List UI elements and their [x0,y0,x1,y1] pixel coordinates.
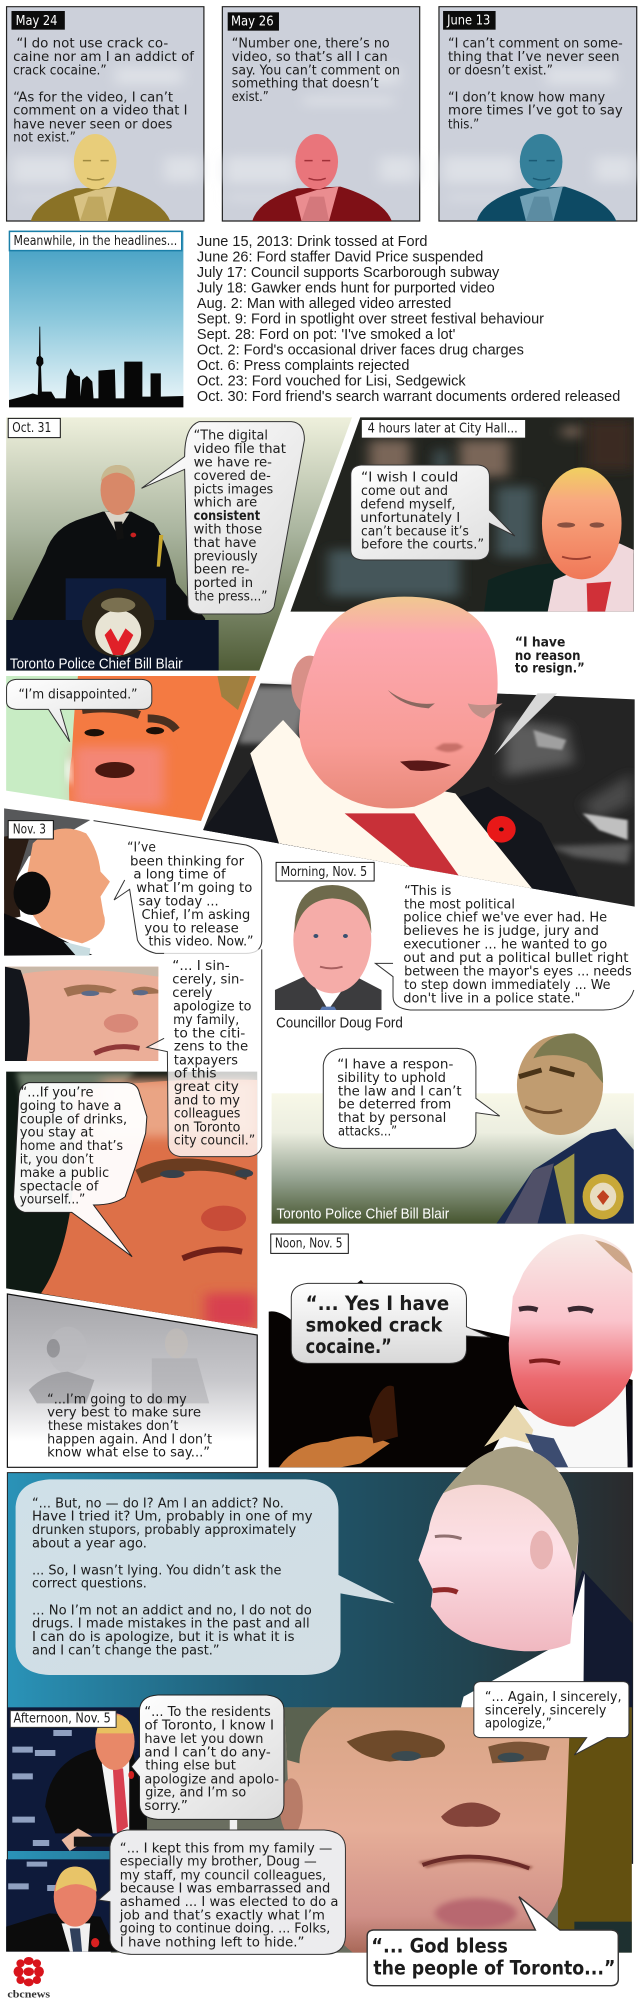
panel: Blair responsibility [272,1033,634,1224]
speech bubble: sincerely apologize: to the citi- [174,1026,245,1041]
speech bubble: you to release [144,921,239,936]
speech bubble: kept this from my family: going to continue doing. ... Folks, [120,1921,330,1936]
panel: Ford apologizing close-up [5,967,158,1061]
date label [271,1234,348,1253]
speech bubble: you stay at [20,1125,94,1140]
speech bubble: again I sincerely [474,1682,629,1755]
speech bubble: residents of Toronto: thing else but [145,1758,236,1773]
speech bubble: sincerely apologize: and to my [174,1093,240,1108]
quote: “I have [515,635,565,650]
quote [232,36,400,105]
panel: 4 hours later [290,417,634,612]
panel: May 24 [7,7,204,221]
speech bubble: sincerely apologize [147,949,262,1157]
speech bubble: “I’m disappointed.” [18,687,137,702]
speech bubble: the press...” [194,589,267,604]
quote: these mistakes don’t [48,1418,179,1434]
headline list: June 15, 2013: Drink tossed at Ford [197,234,427,250]
panel: Noon Nov. 5 [269,1234,633,1467]
speech bubble: video file that [194,441,286,457]
figure: Ford close-up profile [16,1072,257,1330]
date label [8,418,60,438]
panel: Toronto skyline [9,231,183,407]
speech bubble: sincerely apologize: of this [174,1066,217,1081]
speech bubble: covered de- [194,468,271,484]
speech bubble: kept this from my family: my staff, my council colleagues, [120,1868,326,1883]
quote: very best to make sure [47,1405,201,1420]
panel: Nov. 3 Ford on radio [4,808,262,956]
quote: not exist.” [13,130,76,145]
speech bubble: cocaine.” [306,1336,392,1358]
headline list: Oct. 2: Ford's occasional driver faces drug charges [197,342,524,358]
speech bubble: residents of Toronto: sorry.” [144,1798,188,1814]
speech bubble: ported in [194,575,253,591]
speech bubble: defend myself, [360,497,455,512]
headline list: July 18: Gawker ends hunt for purported video [197,280,495,296]
speech bubble: God bless: “... God bless [371,1936,508,1958]
speech bubble [291,1283,490,1363]
speech bubble: sincerely apologize: my family, [173,1012,239,1028]
figure: Ford at noon [279,1234,633,1467]
panel: Oct. 31 Chief Blair at podium [6,417,352,672]
speech bubble: been re- [194,562,249,577]
speech bubble: that have [194,535,256,551]
quote: exist.” [232,89,269,105]
figure: Ford with headphones [4,808,110,956]
headline list: July 17: Council supports Scarborough subway [197,265,499,281]
figure: Ford eyes [5,967,158,1061]
speech bubble [14,1083,147,1257]
speech bubble: previously [194,549,258,564]
quote: “I don’t know how many [448,90,605,105]
speech bubble: which are [194,495,257,510]
quote: caine nor am I an addict of [13,49,195,65]
quote: comment on a video that I [13,103,187,118]
speech bubble: kept this from my family: ashamed ... I was elected to do a [120,1894,338,1910]
speech bubble: picts images [194,482,273,497]
speech bubble: the law and I can’t [338,1084,462,1099]
quote [13,36,195,145]
wordmark: cbcnews [7,1988,50,2000]
panel: disappointed Ford [6,676,256,823]
panel: closeup with quote [6,949,262,1330]
panel: teal "not an addict" [7,1447,633,1863]
speech bubble [351,465,515,560]
figure: ghost radio studio [29,1327,209,1403]
speech bubble: can’t because it’s [361,524,469,539]
quote: say. You can’t comment on [232,63,400,78]
speech bubble: residents of Toronto: “... To the residents [144,1704,271,1720]
time label [362,420,525,438]
speech bubble: sincerely apologize: cerely [172,985,213,1001]
headline list: Sept. 9: Ford in spotlight over street festival behaviour [197,311,545,327]
headline list: June 26: Ford staffer David Price suspended [197,249,483,265]
speech bubble: sincerely apologize: taxpayers [174,1053,238,1068]
date label: Noon, Nov. 5 [275,1236,343,1251]
speech bubble [323,1048,500,1148]
headline list: Sept. 28: Ford on pot: 'I've smoked a lot' [197,327,455,343]
quote: “Number one, there’s no [232,36,390,51]
figure: Ford close-up [66,676,256,823]
speech bubble: home and that’s [20,1138,123,1154]
panel: May 26 [222,7,420,221]
figure: red Ford [252,134,392,221]
speech bubble: “This is [404,883,451,899]
speech bubble [142,422,304,614]
speech bubble: smoked crack [306,1315,443,1337]
speech bubble: come out and [361,483,448,499]
speech bubble: attacks...” [338,1124,397,1139]
afternoon label [10,1711,116,1727]
caption: Toronto Police Chief Bill Blair [277,1206,450,1222]
speech bubble: ... No I’m not an addict and no, I do not do [32,1603,312,1618]
speech bubble: “I’ve [127,840,156,855]
speech bubble: kept this from my family: especially my brother, Doug — [120,1854,317,1869]
figure: Bill Blair [6,465,219,671]
date label: May 26 [231,14,274,29]
speech tail [494,693,557,755]
date label: Oct. 31 [12,420,51,436]
speech bubble: “... Yes I have [306,1293,449,1315]
speech bubble: “... But, no — do I? Am I an addict? No. [32,1496,284,1511]
speech bubble: it, you don’t [20,1152,94,1167]
quote: “I do not use crack co- [16,36,168,51]
speech bubble: ... So, I wasn’t lying. You didn’t ask the [32,1563,281,1578]
panel: Ford no reason to resign [203,597,635,907]
quote: no reason [515,648,581,664]
speech bubble: residents of Toronto: of Toronto, I know I [144,1718,274,1733]
headline list: Oct. 6: Press complaints rejected [197,358,409,374]
figure: Ford in profile [418,1446,632,1864]
speech bubble [375,883,634,1010]
speech bubble: yourself...” [20,1192,85,1207]
speech bubble: what I’m going to [136,880,252,896]
speech bubble: before the courts.” [361,537,484,552]
speech bubble [7,679,152,742]
figure: yellow Ford [31,134,170,221]
speech bubble: couple of drinks, [20,1112,127,1127]
date label: May 24 [16,13,57,29]
caption: Councillor Doug Ford [276,1015,403,1031]
quote: to resign.” [515,661,585,676]
speech bubble: been thinking for [130,854,244,869]
time label: 4 hours later at City Hall... [368,421,518,436]
quote: this.” [448,117,479,132]
speech bubble: residents of Toronto: and I can’t do any- [144,1745,271,1760]
speech bubble: sincerely apologize: colleagues [174,1106,240,1121]
date label [11,11,65,30]
speech bubble: sibility to uphold [337,1070,446,1086]
speech bubble: about a year ago. [32,1536,147,1551]
speech bubble: correct questions. [32,1576,147,1591]
figure: Ford's large face [230,1707,632,1953]
speech bubble: residents of Toronto [131,1695,284,1819]
speech bubble: Have I tried it? Um, probably in one of my [32,1509,313,1524]
speech bubble: and I can’t change the past.” [32,1643,219,1658]
speech bubble: God bless [367,1897,618,1986]
heading label [9,231,182,251]
quote: know what else to say...” [47,1445,210,1460]
speech bubble: believes he is judge, jury and [403,923,599,939]
speech bubble: a long time of [133,867,226,882]
speech bubble: again I sincerely: apologize,” [485,1716,552,1731]
speech bubble: sincerely apologize: on Toronto [174,1120,240,1135]
speech bubble: sincerely apologize: zens to the [174,1039,248,1054]
speech bubble: kept this from my family: because I was embarrassed and [120,1881,330,1896]
speech bubble [16,1479,395,1675]
figure: Doug Ford [275,885,382,1010]
speech bubble: the most political [404,897,515,912]
caption: Toronto Police Chief Bill Blair [10,656,183,672]
speech bubble: unfortunately I [360,510,460,526]
speech bubble: going to have a [20,1098,121,1114]
speech bubble: make a public [20,1165,109,1181]
quote [448,36,623,132]
date label: Nov. 3 [13,822,46,837]
speech bubble: spectacle of [20,1179,99,1194]
speech bubble: I can do is apologize, but it is what it is [32,1629,295,1645]
quote: something that doesn’t [232,76,379,91]
speech bubble: kept this from my family: I have nothing left to hide.” [120,1935,304,1950]
speech bubble: don't live in a police state." [403,991,581,1006]
quote: crack cocaine.” [13,63,107,78]
speech bubble [94,821,262,953]
speech bubble: kept this from my family [98,1830,345,1954]
speech bubble: kept this from my family: job and that’s exactly what I’m [119,1908,325,1923]
quote: have never seen or does [13,117,172,132]
date label [443,11,496,30]
logo: CBC News [7,1957,50,2000]
date label: Morning, Nov. 5 [281,864,367,880]
speech bubble: kept this from my family: “... I kept this from my family — [120,1841,332,1856]
icon: skyline silhouette [9,327,183,407]
speech bubble: sincerely apologize: cerely, sin- [172,972,244,987]
speech bubble: sincerely apologize: city council.” [174,1133,255,1148]
panel: Morning Nov. 5 Doug Ford [275,862,634,1031]
afternoon label: Afternoon, Nov. 5 [14,1711,111,1726]
figure: blue Ford [477,134,616,221]
speech bubble: that by personal [338,1110,446,1126]
heading label: Meanwhile, in the headlines... [14,233,177,249]
quote [515,635,585,676]
speech bubble: residents of Toronto: gize, and I’m so [145,1785,246,1800]
date label [228,12,279,31]
speech bubble: residents of Toronto: apologize and apolo- [144,1772,279,1787]
speech bubble: drunken stupors, probably approximately [32,1522,297,1538]
speech bubble: we have re- [194,455,272,470]
date label [276,862,374,881]
speech bubble: sincerely apologize: apologize to [173,999,252,1014]
quote [47,1392,212,1460]
speech bubble: this video. Now.” [149,934,254,949]
speech bubble: “The digital [194,428,268,443]
quote: video, so that’s all I can [232,49,388,65]
icon: CBC gem [14,1957,44,1986]
quote: “...I’m going to do my [47,1392,187,1407]
date label [8,821,53,839]
panel: June 13 [439,7,637,221]
speech bubble: Chief, I’m asking [142,907,250,923]
speech bubble: again I sincerely: sincerely, sincerely [485,1703,607,1718]
panel: Afternoon photo 1 [7,1707,150,1851]
headline list: Aug. 2: Man with alleged video arrested [197,296,451,312]
speech bubble: with those [194,522,262,537]
speech bubble: say today ... [139,894,219,909]
speech bubble: “I wish I could [361,470,458,485]
speech bubble: “I have a respon- [337,1057,453,1072]
headline list [197,234,620,405]
speech bubble: “...If you’re [21,1085,94,1100]
quote: happen again. And I don’t [47,1432,212,1447]
date label: June 13 [446,13,490,28]
quote: or doesn’t exist.” [448,63,553,78]
figure: Ford at lectern [12,1713,150,1851]
figure: Ford's head [291,597,503,808]
figure: Ford in hallway [484,467,634,612]
panel: Afternoon big face [111,1707,632,1953]
speech bubble: sincerely apologize: “... I sin- [172,958,230,974]
speech bubble: residents of Toronto: have let you down [144,1731,263,1747]
figure: jacket and shirt [203,720,583,903]
figure: Ford facing camera [6,1862,117,1952]
speech bubble: sincerely apologize: great city [174,1079,239,1095]
quote: “As for the video, I can’t [13,90,173,105]
speech bubble: consistent [194,508,260,524]
figure: Bill Blair portrait [496,1033,634,1224]
panel: Afternoon photo 2 [6,1859,117,1952]
headline list: Oct. 23: Ford vouched for Lisi, Sedgewick [197,373,467,389]
panel: grey closing quote [7,1294,257,1467]
speech bubble: drugs. I made mistakes in the past and all [32,1616,310,1631]
speech bubble: be deterred from [338,1097,451,1112]
